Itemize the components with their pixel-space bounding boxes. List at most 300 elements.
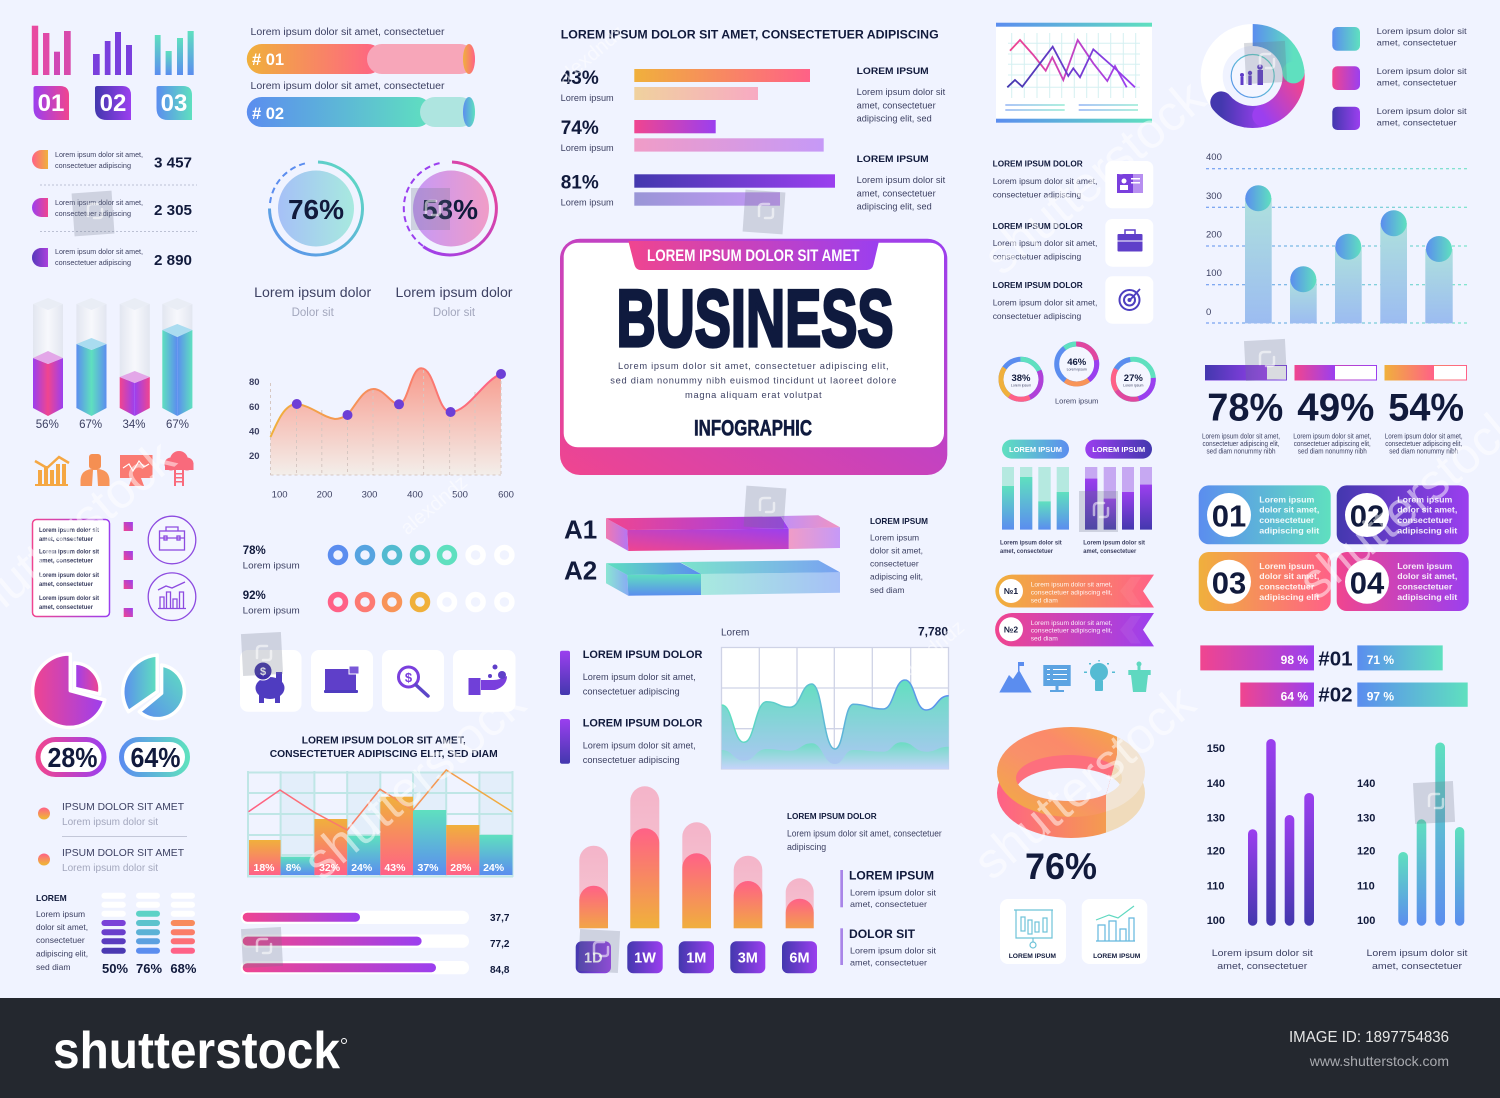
tab label: LOREM IPSUM DOLOR SIT AMET — [647, 246, 860, 265]
panel: ring progress rows — [243, 545, 512, 616]
percentage 54%: sed diam nonummy nibh — [1389, 448, 1458, 456]
list item one: LOREM IPSUM DOLOR — [583, 649, 702, 661]
ring row 92% — [243, 590, 512, 616]
panel: list with purple markers — [560, 649, 702, 766]
progress 77,2 — [241, 934, 510, 950]
table text: LOREM — [36, 893, 67, 903]
panel: comparison bars — [1200, 645, 1468, 707]
axis labels: 110 — [1207, 880, 1224, 892]
stat row 2 890: 2 890 — [154, 253, 192, 269]
bar A1: A1 — [564, 514, 597, 544]
note two: adipiscing elit, sed — [857, 202, 932, 212]
chart title: LOREM IPSUM DOLOR SIT AMET, — [302, 734, 466, 746]
note: adipiscing elit, — [870, 572, 923, 582]
row 81%: 81% — [561, 172, 599, 194]
badge 01 — [34, 86, 69, 120]
list entry id card: consectetuer adipiscing — [993, 190, 1081, 200]
notes card: amet, consectetuer — [39, 536, 93, 543]
capsule column 50% — [101, 893, 128, 976]
panel: radial gauges — [254, 162, 513, 319]
column group purple: Lorem ipsum dolor sit — [1083, 540, 1146, 546]
bar A2 — [564, 555, 840, 596]
legend swatch two — [1332, 66, 1467, 90]
panel: paired horizontal bars — [561, 28, 946, 212]
3D bar 34% — [120, 298, 150, 431]
note: Lorem ipsum — [870, 532, 919, 542]
bar labels: 24% — [483, 862, 505, 874]
list item one — [560, 649, 702, 698]
bar labels: 43% — [384, 862, 406, 874]
donut chart — [1212, 35, 1304, 117]
watermark text: shutterstock — [963, 673, 1206, 890]
row 74% — [561, 118, 824, 153]
card paragraph: Lorem ipsum dolor sit amet, consectetuer adipiscing elit, — [618, 361, 889, 371]
note two: LOREM IPSUM — [857, 154, 929, 165]
percentage 78%: Lorem ipsum dolor sit amet, — [1202, 434, 1280, 440]
3D bar 67% B — [162, 298, 192, 431]
chart labels: 7,780 — [918, 624, 948, 638]
gauge 53% — [404, 162, 496, 255]
value bars — [579, 828, 814, 928]
percentage 78%: sed diam nonummy nibh — [1206, 448, 1276, 456]
panel: ribbons — [995, 575, 1154, 646]
chart labels — [721, 624, 948, 638]
card 03: consectetuer — [1259, 581, 1315, 591]
panel: three percentages — [1202, 365, 1466, 456]
image id: IMAGE ID: 1897754836 — [1289, 1029, 1449, 1046]
ring row 78%: Lorem ipsum — [243, 560, 300, 572]
list entry target: consectetuer adipiscing — [993, 311, 1081, 321]
bar labels: 24% — [351, 862, 373, 874]
card paragraph: magna aliquam erat volutpat — [685, 390, 822, 400]
watermark text: shutterstock — [973, 68, 1216, 285]
capsule column 76% — [136, 893, 162, 976]
card — [996, 23, 1152, 123]
footer bar — [0, 998, 1500, 1098]
list entry id card: LOREM IPSUM DOLOR — [993, 160, 1083, 168]
note one: Lorem ipsum dolor sit — [857, 87, 946, 97]
ribbon 2: consectetuer adipiscing elit, — [1031, 628, 1113, 635]
note: dolor sit amet, — [870, 545, 923, 555]
axis labels: 130 — [1357, 812, 1375, 824]
ring pale part — [1106, 737, 1145, 832]
bar labels: 28% — [450, 862, 472, 874]
square bullets — [124, 522, 133, 617]
column group purple — [1083, 467, 1152, 555]
ring 27%: 27% — [1124, 373, 1143, 384]
legend swatch three: amet, consectetuer — [1377, 117, 1457, 127]
axis labels: 110 — [1357, 880, 1375, 892]
tile bar chart — [1082, 899, 1147, 964]
panel: tube progress bars — [247, 27, 475, 127]
stat row 3 457: 3 457 — [154, 156, 192, 172]
list entry briefcase: Lorem ipsum dolor sit amet, — [993, 238, 1097, 248]
ring colored part — [997, 727, 1117, 838]
panel: business title card — [560, 239, 947, 475]
chart: wave area chart — [721, 624, 949, 769]
badge 02 — [95, 86, 131, 120]
gauge caption left — [254, 285, 372, 319]
3D bar 34%: 34% — [122, 419, 146, 431]
tile candlestick board — [1000, 899, 1066, 964]
icon: rising chart — [35, 457, 69, 486]
axis labels: 100 — [1207, 915, 1225, 927]
axis labels: 80 — [249, 377, 260, 388]
notes card: amet, consectetuer — [39, 604, 93, 611]
note two: Lorem ipsum dolor sit — [857, 175, 946, 185]
panel: isometric 3D bars — [33, 298, 192, 431]
table text: sed diam — [36, 962, 70, 972]
card paragraph: sed diam nonummy nibh euismod tincidunt ut laoreet dolore — [610, 376, 896, 386]
pie chart 64% — [123, 655, 184, 719]
gauge 53%: 53% — [422, 194, 478, 225]
indigo line series — [1007, 47, 1135, 87]
list entry briefcase: LOREM IPSUM DOLOR — [993, 222, 1083, 231]
bars — [249, 797, 512, 875]
comparison row 02: 64 % — [1281, 690, 1308, 704]
card 02: 02 — [1350, 498, 1384, 534]
legend item two: IPSUM DOLOR SIT AMET — [62, 847, 185, 859]
pill 64%: 64% — [130, 742, 181, 773]
card 04: dolor sit amet, — [1397, 571, 1457, 581]
card 02: dolor sit amet, — [1397, 504, 1457, 514]
icon: mountain — [999, 662, 1032, 692]
y axis labels — [1206, 152, 1222, 318]
bar chart 03 — [155, 31, 194, 75]
percentage 78%: 78% — [1207, 387, 1283, 430]
y axis labels: 300 — [1206, 191, 1222, 202]
chart: thin teal bars — [1357, 742, 1468, 971]
axis labels: 120 — [1357, 846, 1375, 858]
tube 02 — [247, 81, 475, 127]
bars — [1248, 739, 1314, 926]
footer logo: shutterstock — [53, 1022, 340, 1080]
ribbon 1: consectetuer adipiscing elit, — [1031, 589, 1113, 596]
note heading block — [787, 812, 942, 852]
row 74%: 74% — [561, 118, 599, 139]
3D bar 56%: 56% — [36, 419, 59, 431]
panel: capsule table — [36, 893, 197, 976]
progress 77,2: 77,2 — [490, 939, 510, 950]
legend swatch three — [1332, 106, 1467, 130]
panel: blue icon row — [999, 660, 1151, 692]
comparison row 02 — [1240, 682, 1468, 707]
bar A2: A2 — [564, 555, 597, 585]
icon: briefcase circle — [148, 516, 196, 564]
legend swatch three: Lorem ipsum dolor sit — [1377, 106, 1467, 116]
ring 46%: Lorem ipsum — [1067, 368, 1087, 372]
chart: thin purple bars — [1207, 739, 1314, 971]
stat row 2 305 — [32, 198, 192, 219]
y axis labels: 200 — [1206, 230, 1222, 240]
donut centre icon — [1231, 54, 1274, 98]
note heading block: Lorem ipsum dolor sit amet, consectetuer — [787, 829, 942, 839]
bar labels: 37% — [417, 862, 439, 874]
percentage 54%: 54% — [1388, 387, 1464, 430]
stat row 2 890: consectetuer adipiscing — [55, 258, 131, 267]
ribbon 1: №1 — [1004, 586, 1018, 596]
card 03: Lorem ipsum — [1259, 561, 1315, 571]
icon: monitor — [120, 455, 152, 486]
percentage 54%: Lorem ipsum dolor sit amet, — [1385, 434, 1463, 440]
ribbon 1: sed diam — [1031, 597, 1058, 604]
bar chart 02 — [93, 32, 132, 75]
period buttons: 1D — [584, 950, 603, 966]
percentage 49%: Lorem ipsum dolor sit amet, — [1293, 434, 1371, 440]
card 02: adipiscing elit — [1397, 525, 1457, 535]
ring row 92%: 92% — [243, 590, 266, 602]
area line — [270, 368, 501, 437]
ring row 92%: Lorem ipsum — [243, 606, 300, 616]
note dolor sit: amet, consectetuer — [850, 957, 927, 967]
note dolor sit: Lorem ipsum dolor sit — [850, 945, 937, 955]
title tab — [628, 241, 879, 270]
card 03: 03 — [1212, 565, 1246, 600]
columns — [1245, 198, 1453, 323]
y axis labels: 0 — [1206, 307, 1211, 318]
axis labels: 60 — [249, 402, 260, 413]
notes card: Lorem ipsum dolor sit — [39, 595, 100, 602]
3D bar 67% A: 67% — [79, 419, 102, 431]
card 04: 04 — [1350, 565, 1385, 600]
gauge caption left: Dolor sit — [292, 307, 335, 319]
legend swatch one: amet, consectetuer — [1377, 38, 1457, 48]
note one: adipiscing elit, sed — [857, 114, 932, 124]
legend item one — [38, 801, 185, 828]
gauge 76% — [270, 162, 362, 255]
lower wave — [722, 742, 949, 769]
notes card: Lorem ipsum dolor sit — [39, 527, 100, 534]
legend item two: Lorem ipsum dolor sit — [62, 863, 158, 874]
bars — [1398, 742, 1464, 926]
note lorem ipsum: amet, consectetuer — [850, 899, 927, 909]
card 01: Lorem ipsum — [1259, 494, 1315, 504]
badge 03 — [156, 86, 192, 120]
caption: amet, consectetuer — [1217, 961, 1307, 971]
comparison row 02: #02 — [1318, 683, 1353, 706]
note two: amet, consectetuer — [857, 188, 936, 198]
notes card: amet, consectetuer — [39, 581, 93, 588]
panel: donut with legend — [1212, 26, 1467, 130]
axis labels: 40 — [249, 426, 260, 438]
bar labels: 32% — [319, 862, 341, 874]
stat row 3 457 — [32, 150, 192, 172]
ribbon 2: №2 — [1004, 624, 1018, 634]
note heading block: LOREM IPSUM DOLOR — [787, 812, 877, 821]
axis labels: 100 — [1357, 915, 1375, 927]
watermark text — [0, 21, 1500, 890]
card frame — [560, 239, 947, 475]
axis labels: 140 — [1357, 778, 1375, 790]
ring value: 76% — [1025, 846, 1097, 887]
caption — [1366, 948, 1468, 971]
list item one: consectetuer adipiscing — [583, 687, 680, 698]
percentage 49% — [1293, 365, 1376, 456]
list item one: Lorem ipsum dolor sit amet, — [583, 672, 696, 683]
badge 03: 03 — [161, 90, 187, 117]
card 04 — [1337, 552, 1469, 611]
axis labels: 200 — [317, 490, 332, 500]
comparison row 01: 98 % — [1281, 653, 1308, 667]
legend swatch two: Lorem ipsum dolor sit — [1377, 66, 1467, 76]
icon: cloud ladder — [164, 451, 194, 486]
watermark stamps — [72, 41, 1455, 973]
ribbon 2 — [995, 613, 1154, 646]
comparison row 01: #01 — [1318, 648, 1353, 671]
row 74%: Lorem ipsum — [561, 143, 614, 153]
chart: orange area chart — [249, 368, 514, 500]
ring row 78% — [243, 545, 512, 572]
watermark text: shutterstock — [293, 673, 536, 890]
icon: bucket — [1128, 662, 1151, 692]
note lorem ipsum: Lorem ipsum dolor sit — [850, 887, 937, 897]
watermark stamp brackets — [88, 54, 1443, 956]
note lorem ipsum — [840, 869, 937, 909]
panel: outline icon tiles — [1000, 899, 1147, 964]
bar labels: 18% — [253, 862, 275, 874]
list entry target: Lorem ipsum dolor sit amet, — [993, 298, 1097, 308]
ring 46% — [1057, 344, 1097, 384]
table text — [36, 893, 88, 972]
note dolor sit: DOLOR SIT — [849, 927, 916, 941]
ribbon 1: Lorem ipsum dolor sit amet, — [1031, 581, 1113, 588]
tube 01 — [247, 27, 475, 74]
card 02: consectetuer — [1397, 515, 1453, 525]
capsule column 68%: 68% — [170, 961, 197, 976]
stat row 2 890: Lorem ipsum dolor sit amet, — [55, 247, 143, 256]
icon: piggy bank — [240, 650, 302, 712]
axis labels: 600 — [498, 490, 514, 500]
panel: finance icon tiles — [240, 650, 516, 712]
3D bar 67% A — [76, 298, 106, 431]
ring 38%: Lorem ipsum — [1011, 384, 1031, 388]
gauge caption right: Lorem ipsum dolor — [396, 285, 513, 300]
period buttons: 1M — [686, 950, 706, 966]
percentage 49%: 49% — [1297, 387, 1374, 430]
axis labels: 300 — [362, 490, 377, 500]
comparison row 02: 97 % — [1367, 690, 1394, 704]
icon: chart circle — [148, 573, 196, 620]
percentage 78%: consectetuer adipiscing elit, — [1202, 441, 1280, 448]
table text: consectetuer — [36, 935, 85, 945]
ribbon 2: Lorem ipsum dolor sit amet, — [1031, 620, 1113, 627]
pill teal: LOREM IPSUM — [1009, 445, 1062, 454]
chart: 3D ring 76% — [997, 727, 1145, 887]
note: LOREM IPSUM — [870, 516, 928, 526]
card 03: adipiscing elit — [1259, 592, 1319, 602]
caption: amet, consectetuer — [1372, 961, 1462, 971]
table text: Lorem ipsum — [36, 909, 85, 919]
axis labels — [1207, 743, 1225, 927]
row 81% — [561, 172, 835, 207]
row 81%: Lorem ipsum — [561, 197, 614, 207]
stat row 3 457: Lorem ipsum dolor sit amet, — [55, 150, 143, 159]
row 43%: 43% — [561, 68, 599, 89]
pill purple — [1085, 440, 1152, 459]
icon: light bulb — [1084, 660, 1115, 691]
axis labels: 500 — [452, 490, 468, 500]
progress 37,7: 37,7 — [490, 913, 510, 924]
panel: numbered bar charts — [32, 26, 194, 120]
axis labels: 120 — [1207, 846, 1225, 858]
ribbon 2: sed diam — [1031, 636, 1058, 642]
ring 27% — [1113, 359, 1153, 399]
legend swatch two: amet, consectetuer — [1377, 77, 1457, 87]
legend item one: Lorem ipsum dolor sit — [62, 817, 158, 828]
icon: magnifier dollar — [382, 650, 444, 712]
stat row 2 305: 2 305 — [154, 203, 192, 219]
list item two: LOREM IPSUM DOLOR — [583, 717, 702, 729]
note — [870, 516, 928, 595]
list entry briefcase — [993, 219, 1153, 267]
upper wave line — [722, 680, 949, 749]
axis labels: 400 — [407, 490, 423, 500]
axis labels: 140 — [1207, 778, 1225, 790]
panel: numbered cards — [1199, 485, 1469, 611]
axis labels: 150 — [1207, 743, 1225, 755]
panel: orange icon row — [35, 451, 194, 486]
panel: icon list — [993, 160, 1153, 324]
tile candlestick board: LOREM IPSUM — [1009, 953, 1056, 960]
3D bar 67% B: 67% — [166, 419, 189, 431]
axis labels: 100 — [272, 490, 288, 500]
tube 01: # 01 — [252, 51, 284, 69]
period buttons — [576, 941, 817, 973]
list entry briefcase: consectetuer adipiscing — [993, 252, 1081, 262]
pill 28%: 28% — [48, 742, 98, 773]
period buttons: 6M — [789, 950, 810, 966]
caption: Lorem ipsum dolor sit — [1212, 948, 1313, 958]
card 04: adipiscing elit — [1397, 592, 1457, 602]
stat row 2 890 — [32, 247, 192, 269]
gauge 76%: 76% — [288, 194, 344, 225]
icon: hand with coins — [453, 650, 516, 712]
axis labels — [1357, 778, 1375, 927]
panel: small multi-colour rings — [1001, 344, 1153, 406]
card 01: consectetuer — [1259, 515, 1315, 525]
gauge caption right: Dolor sit — [433, 307, 476, 319]
percentage 54%: consectetuer adipiscing elit, — [1385, 441, 1462, 448]
list item two: consectetuer adipiscing — [583, 755, 680, 766]
watermark text: alexdndz — [553, 21, 629, 90]
tube 01: Lorem ipsum dolor sit amet, consectetuer — [250, 27, 445, 38]
3D bar 56% — [33, 298, 63, 431]
bar chart 01 — [32, 26, 71, 75]
notes card: amet, consectetuer — [39, 558, 93, 564]
icon: magnifier dollar: $ — [405, 670, 413, 685]
percentage 54% — [1385, 365, 1466, 456]
card 01: dolor sit amet, — [1259, 504, 1319, 514]
note two — [857, 154, 946, 212]
caption — [1212, 948, 1313, 971]
progress 84,8: 84,8 — [490, 965, 510, 976]
note lorem ipsum: LOREM IPSUM — [849, 869, 934, 883]
bar labels: 8% — [286, 862, 302, 874]
panel: notes card with outline icons — [32, 516, 196, 620]
panel: line chart card — [996, 23, 1152, 123]
badge 01: 01 — [38, 90, 64, 117]
column group teal: amet, consectetuer — [1000, 548, 1053, 555]
note: consectetuer — [870, 558, 919, 568]
pill teal — [1002, 440, 1069, 459]
pie chart 28% — [33, 654, 105, 727]
bar labels — [253, 862, 505, 874]
card 03: dolor sit amet, — [1259, 571, 1319, 581]
list item two: Lorem ipsum dolor sit amet, — [583, 740, 696, 752]
percentage 49%: sed diam nonummy nibh — [1298, 448, 1367, 456]
stat row 2 305: Lorem ipsum dolor sit amet, — [55, 198, 143, 207]
column group teal: Lorem ipsum dolor sit — [1000, 540, 1062, 546]
